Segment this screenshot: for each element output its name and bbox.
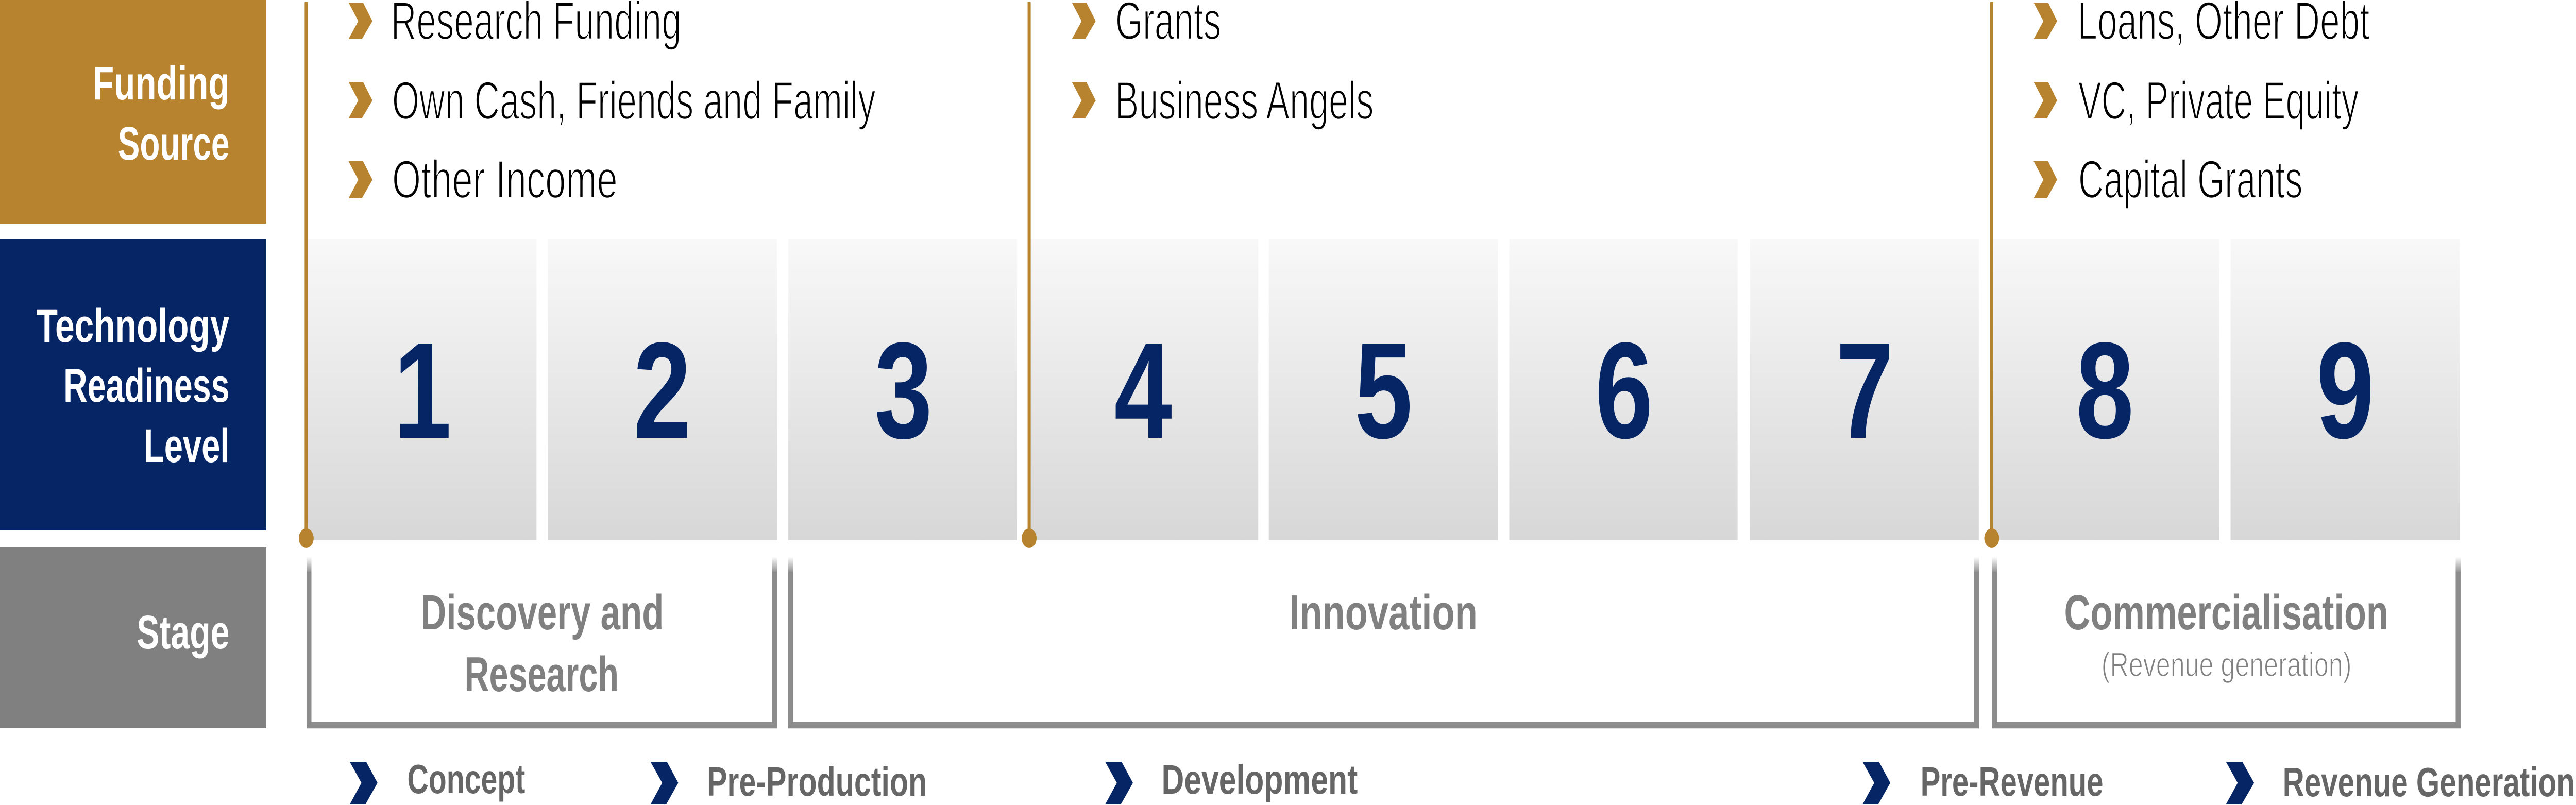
- phase: concept: Concept: [408, 757, 525, 802]
- funding list: commercial stage: [2033, 0, 2369, 210]
- panel: stage label: Stage: [137, 606, 229, 659]
- stage: discovery and research: Research: [464, 647, 619, 702]
- tile 9: [2231, 239, 2460, 540]
- chart: technology readiness level tiles: [308, 239, 2460, 540]
- tile 3: [788, 239, 1017, 540]
- tile 6: [1509, 239, 1738, 540]
- tile 7: 7: [1836, 314, 1894, 467]
- tile 9: 9: [2316, 314, 2375, 467]
- panel: funding source label: Funding: [93, 57, 229, 110]
- tile 4: 4: [1114, 314, 1172, 467]
- funding list: early stage: [348, 0, 876, 210]
- stage: discovery and research: Discovery and: [420, 585, 664, 640]
- stage: discovery and research: [309, 557, 774, 725]
- tile 2: 2: [633, 314, 691, 467]
- phase: development: Development: [1161, 757, 1358, 803]
- panel: funding source label: [0, 0, 266, 224]
- tile 8: 8: [2076, 314, 2134, 467]
- tile 2: [548, 239, 777, 540]
- icon: gold chevron: [1072, 82, 1096, 118]
- icon: gold chevron: [348, 161, 372, 198]
- marker line: early funding start: [299, 2, 314, 548]
- funding list: commercial stage: Capital Grants: [2078, 149, 2302, 210]
- funding list: innovation stage: Business Angels: [1115, 70, 1374, 131]
- icon: gold chevron: [348, 3, 372, 39]
- marker line: innovation funding start: [1022, 2, 1037, 548]
- stage: commercialisation: (Revenue generation): [2102, 646, 2351, 684]
- phase: concept: [350, 757, 525, 804]
- marker line: commercial funding start: [1984, 2, 1999, 548]
- tile 4: [1029, 239, 1258, 540]
- tile 8: [1991, 239, 2219, 540]
- tile 7: [1750, 239, 1979, 540]
- panel: stage label: [0, 547, 266, 728]
- tile 5: [1269, 239, 1498, 540]
- tile 1: 1: [394, 314, 451, 467]
- icon: gold chevron: [2033, 3, 2057, 39]
- icon: gold chevron: [1072, 3, 1096, 39]
- panel: technology readiness level label: Readiness: [63, 359, 229, 412]
- stage: innovation: Innovation: [1289, 585, 1478, 640]
- panel: technology readiness level label: Technology: [37, 300, 229, 352]
- icon: gold chevron: [2033, 82, 2057, 118]
- panel: technology readiness level label: Level: [144, 420, 229, 472]
- funding list: early stage: Own Cash, Friends and Family: [392, 70, 876, 131]
- tile 5: 5: [1354, 314, 1413, 467]
- stage: commercialisation: [1994, 557, 2458, 725]
- phase: pre-production: Pre-Production: [707, 759, 927, 805]
- tile 1: [308, 239, 536, 540]
- panel: technology readiness level label: [0, 239, 266, 530]
- funding list: early stage: Other Income: [392, 149, 618, 210]
- icon: gold chevron: [2033, 161, 2057, 198]
- tile 6: 6: [1595, 314, 1653, 467]
- phase: pre-revenue: Pre-Revenue: [1921, 759, 2104, 805]
- funding list: commercial stage: VC, Private Equity: [2078, 70, 2359, 131]
- funding list: innovation stage: [1072, 0, 1374, 131]
- icon: gold chevron: [348, 82, 372, 118]
- panel: funding source label: Source: [118, 117, 229, 170]
- stage: innovation: [791, 557, 1976, 725]
- stage: commercialisation: Commercialisation: [2064, 585, 2388, 640]
- tile 3: 3: [874, 314, 933, 467]
